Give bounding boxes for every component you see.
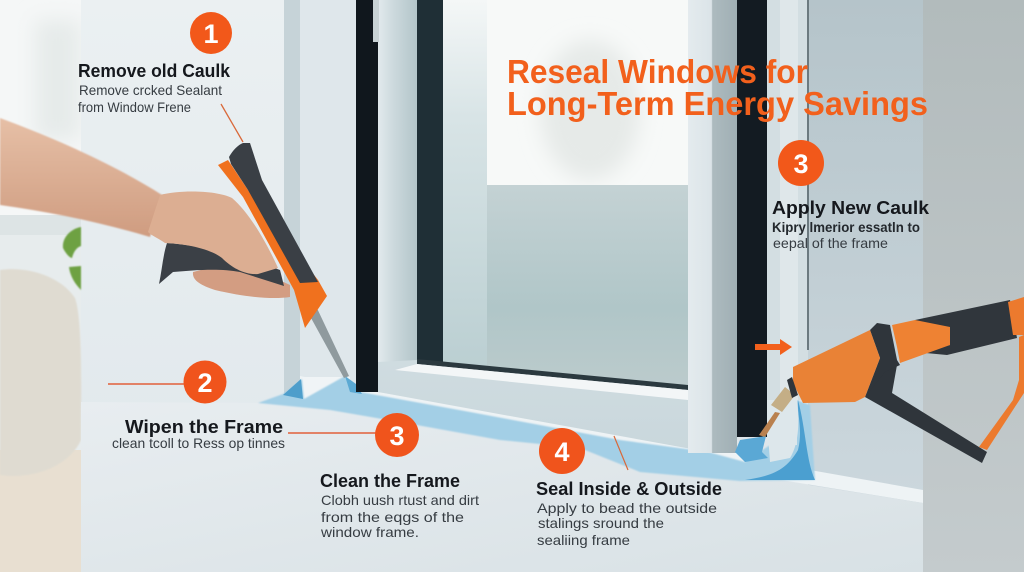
step 2 text (112, 417, 285, 451)
tool dark body (229, 143, 318, 283)
tool grip (159, 243, 284, 286)
gun orange rear (1008, 297, 1024, 335)
gun orange trigger arm (979, 335, 1024, 450)
step 4: seal inside and outside (536, 428, 722, 548)
right step text (772, 198, 930, 251)
badge 1: 1 (203, 19, 219, 49)
gun dark grip (915, 300, 1017, 355)
fingers (193, 262, 290, 298)
badge 2 (184, 360, 226, 404)
step 2: wipen the frame (108, 360, 285, 451)
step 3 text (320, 471, 479, 540)
badge 4: 4 (554, 437, 570, 467)
step 4 text: Seal Inside & Outside (536, 479, 722, 499)
gun orange mid section (892, 320, 950, 363)
gun lower handle (865, 365, 987, 463)
step 1: remove old caulk (78, 12, 243, 142)
leader line 4 (614, 436, 628, 470)
knitted cushion (0, 269, 81, 476)
right step text: Kipry lmerior essatln to (772, 219, 920, 235)
right caulk gun (759, 297, 1024, 463)
step 3: clean the frame (288, 413, 479, 540)
step 4 text: sealiing frame (537, 532, 630, 548)
right step text: eepal of the frame (773, 235, 888, 251)
orange arrow (755, 339, 792, 355)
badge 3: 3 (389, 421, 405, 451)
plant leaves (63, 227, 81, 290)
step 3 text: window frame. (320, 524, 419, 540)
title: Long-Term Energy Savings (507, 85, 928, 122)
window sill and lower wall (81, 376, 923, 572)
step 3 (right): apply new caulk (772, 140, 930, 251)
hand (148, 192, 278, 274)
badge 3 right: 3 (793, 149, 809, 179)
badge 3 (375, 413, 419, 457)
window frame (356, 0, 809, 462)
step 2 text: Wipen the Frame (125, 417, 283, 437)
arm (0, 118, 162, 237)
leader line 2 (108, 383, 186, 385)
left caulk tool held in hand (0, 118, 349, 378)
step 2 text: clean tcoll to Ress op tinnes (112, 435, 285, 451)
gun copper nozzle (759, 412, 780, 437)
step 3 text: Clean the Frame (320, 471, 460, 491)
step 4 text (536, 479, 722, 548)
gun orange body (793, 330, 880, 403)
badge 1 (190, 12, 232, 54)
right step text: Apply New Caulk (772, 198, 930, 218)
leader line 3 (288, 432, 376, 434)
leader line 1 (221, 104, 243, 142)
step 3 text: from the eqgs of the (321, 509, 464, 525)
gun dark collar (865, 323, 900, 397)
step 4 text: Apply to bead the outside (537, 500, 717, 516)
step 1 text: Remove old Caulk (78, 61, 231, 81)
title (507, 53, 928, 122)
tool orange body (218, 160, 327, 328)
badge 2: 2 (197, 368, 213, 398)
blue sealant bead (258, 376, 815, 481)
tool nozzle (305, 304, 349, 378)
step 3 text: Clobh uush rtust and dirt (321, 492, 479, 508)
step 4 text: stalings sround the (538, 515, 664, 531)
step 1 text: Remove crcked Sealant (79, 82, 222, 98)
title: Reseal Windows for (507, 53, 808, 90)
badge 3 right (778, 140, 824, 186)
step 1 text (78, 61, 231, 115)
step 1 text: from Window Frene (78, 99, 191, 115)
badge 4 (539, 428, 585, 474)
